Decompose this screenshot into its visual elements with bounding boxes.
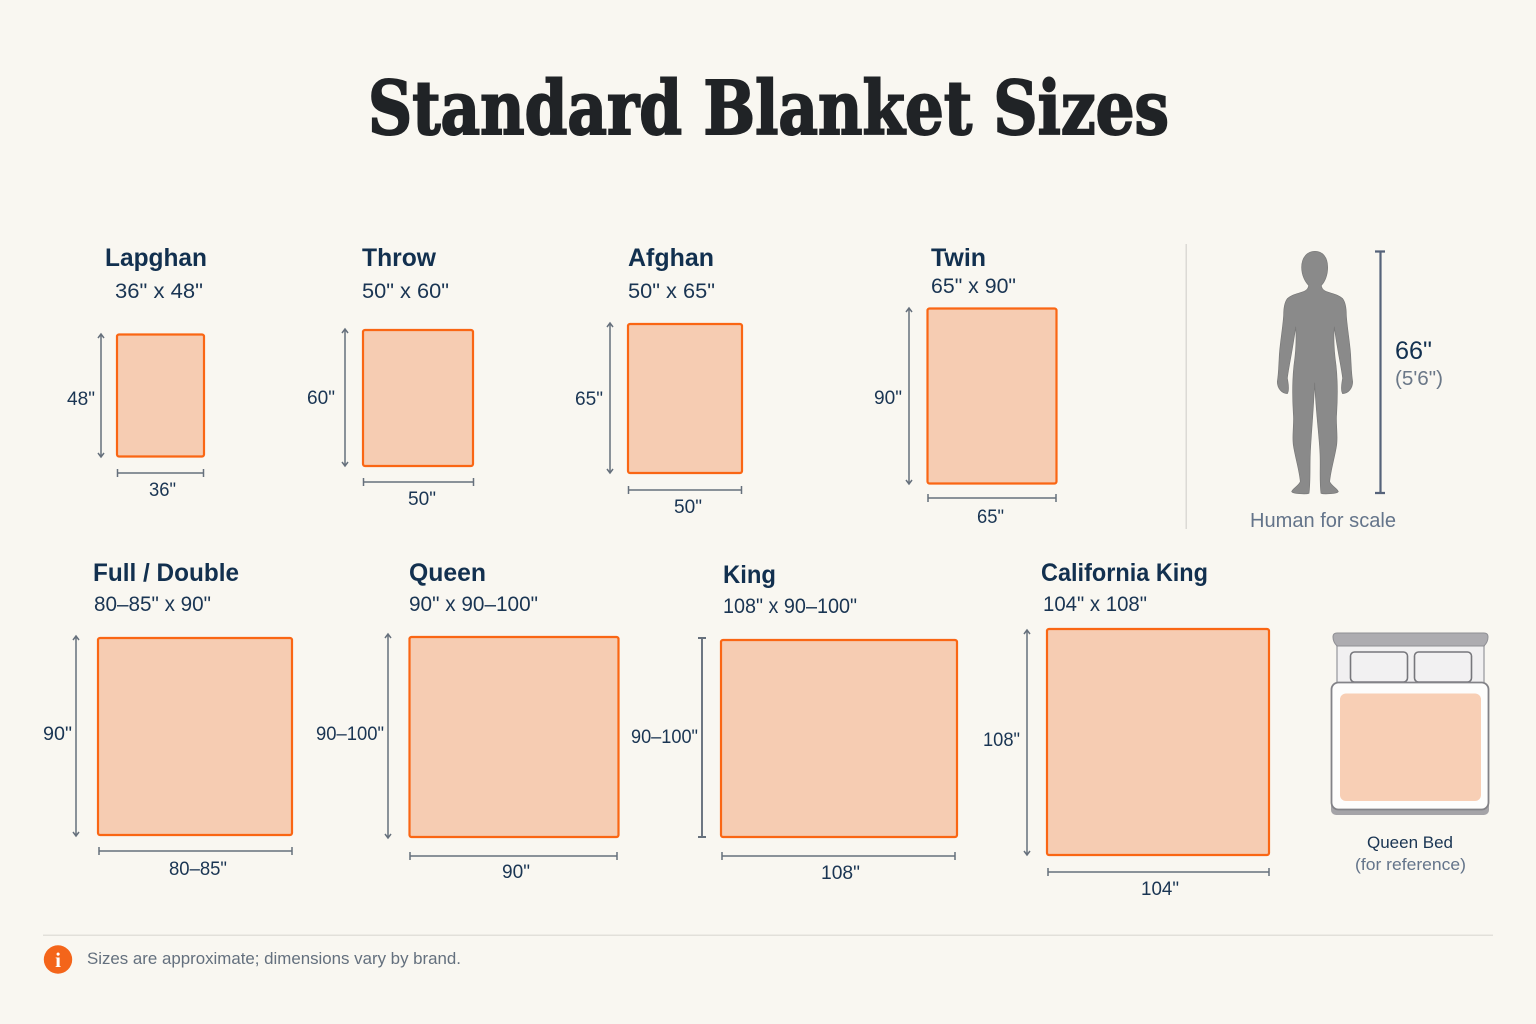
- blanket: Lapghan: [117, 334, 204, 456]
- heading: Full / Double: Full / Double: [93, 559, 239, 587]
- caption: human for scale: Human for scale: [1250, 510, 1396, 532]
- width label: Queen: 90": [502, 862, 530, 883]
- panel: California King: [983, 559, 1269, 900]
- blanket: Throw: [363, 330, 473, 466]
- note text: Sizes are approximate; dimensions vary by brand.: [87, 949, 461, 968]
- width label: Throw: 50": [408, 489, 436, 510]
- heading: Throw: Throw: [362, 244, 437, 272]
- icon: info: [44, 945, 72, 974]
- width bracket: Queen: [410, 852, 617, 860]
- height arrow: Queen: [385, 634, 391, 838]
- heading: California King: California King: [1041, 559, 1208, 587]
- panel: human for scale: [1250, 251, 1443, 532]
- heading: King: King: [723, 561, 776, 589]
- height label: King: 90–100": [631, 727, 698, 748]
- dimensions: Afghan: 50" x 65": [628, 280, 715, 303]
- height label: Queen: 90–100": [316, 724, 384, 745]
- dimensions: Throw: 50" x 60": [362, 280, 449, 303]
- panel: Twin: [874, 244, 1056, 528]
- height arrow: Afghan: [607, 323, 613, 473]
- width bracket: Full / Double: [99, 847, 292, 855]
- height bar: human: [1375, 251, 1385, 493]
- panel: Afghan: [575, 244, 742, 518]
- blanket: King: [721, 640, 957, 837]
- dimensions: Queen: 90" x 90–100": [409, 593, 538, 616]
- blanket: Afghan: [628, 324, 742, 473]
- width label: California King: 104": [1141, 879, 1179, 900]
- width bracket: California King: [1048, 868, 1269, 876]
- width bracket: Lapghan: [118, 469, 204, 477]
- dimensions: King: 108" x 90–100": [723, 595, 857, 618]
- panel: queen bed reference: [1331, 633, 1489, 874]
- caption: for reference: (for reference): [1355, 855, 1466, 874]
- height arrow: Twin: [906, 308, 912, 484]
- width label: Full / Double: 80–85": [169, 859, 227, 880]
- panel: Queen: [316, 559, 618, 883]
- height arrow: Full / Double: [73, 636, 79, 836]
- blanket: Twin: [928, 308, 1056, 484]
- height label: Afghan: 65": [575, 389, 603, 410]
- width bracket: Afghan: [628, 486, 742, 494]
- dimensions: Full / Double: 80–85" x 90": [94, 593, 211, 616]
- height arrow: Lapghan: [98, 334, 104, 457]
- title: Standard Blanket Sizes: [368, 66, 1169, 152]
- height label: Full / Double: 90": [43, 724, 72, 745]
- icon: queen bed: [1331, 633, 1489, 815]
- height arrow: California King: [1024, 630, 1030, 855]
- width bracket: Twin: [928, 494, 1056, 502]
- width label: King: 108": [821, 863, 860, 884]
- heading: Queen: Queen: [409, 559, 486, 587]
- icon: human silhouette: [1277, 251, 1353, 494]
- blanket: California King: [1047, 629, 1269, 855]
- panel: Full / Double: [43, 559, 292, 880]
- width bracket: Throw: [364, 478, 474, 486]
- width label: Afghan: 50": [674, 497, 702, 518]
- height label: Throw: 60": [307, 388, 335, 409]
- height bracket: King: [698, 638, 706, 837]
- height label: Lapghan: 48": [67, 389, 95, 410]
- footer note: [44, 945, 461, 974]
- width label: Lapghan: 36": [149, 480, 176, 501]
- height label: Twin: 90": [874, 388, 902, 409]
- height arrow: Throw: [342, 329, 348, 466]
- panel: Throw: [307, 244, 474, 510]
- width bracket: King: [722, 852, 955, 860]
- heading: Afghan: Afghan: [628, 244, 714, 272]
- icon: info: i: [55, 948, 61, 972]
- height in feet: (5'6"): [1395, 368, 1443, 390]
- panel: Lapghan: [67, 244, 207, 501]
- dimensions: California King: 104" x 108": [1043, 593, 1147, 616]
- height value: 66": [1395, 337, 1432, 365]
- dimensions: Twin: 65" x 90": [931, 275, 1016, 298]
- heading: Lapghan: Lapghan: [105, 244, 207, 272]
- dimensions: Lapghan: 36" x 48": [115, 280, 203, 303]
- width label: Twin: 65": [977, 507, 1004, 528]
- heading: Twin: Twin: [931, 244, 986, 272]
- caption: Queen Bed: Queen Bed: [1367, 833, 1453, 852]
- blanket: Full / Double: [98, 638, 292, 835]
- height label: California King: 108": [983, 730, 1020, 751]
- panel: King: [631, 561, 957, 884]
- blanket: Queen: [410, 637, 618, 837]
